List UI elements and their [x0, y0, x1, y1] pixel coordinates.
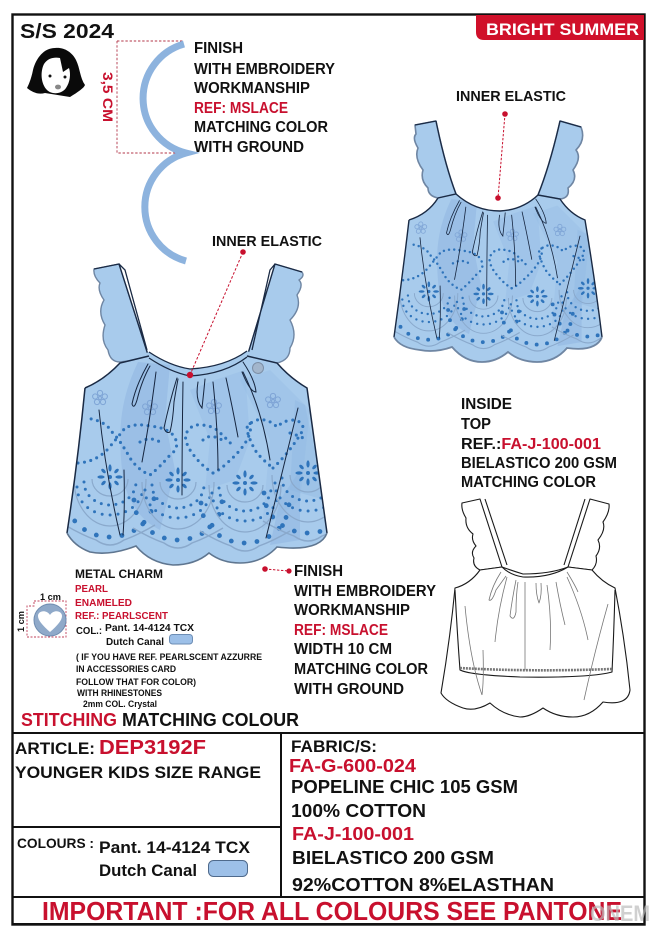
text block: inside top: BIELASTICO 200 GSM	[461, 455, 617, 472]
text block: bottom finish: WORKMANSHIP	[294, 602, 410, 619]
table cell: fabrics	[289, 738, 554, 895]
text block: lace finish: MATCHING COLOR	[194, 119, 328, 136]
callout: inner elastic, large top	[187, 233, 322, 378]
table cell: article	[15, 737, 261, 782]
small garment: blue top back view	[393, 121, 624, 362]
table cell: fabrics: 100% COTTON	[291, 801, 426, 821]
text block: metal charm: ENAMELED	[75, 597, 132, 609]
text block: lace finish: WORKMANSHIP	[194, 80, 310, 97]
icon: metal charm with dimensions: 1 cm	[16, 611, 26, 632]
text block: lace finish: FINISH	[194, 40, 243, 57]
badge: bright summer	[476, 15, 644, 40]
text block: metal charm: IN ACCESSORIES CARD	[76, 664, 176, 675]
note: stitching	[21, 709, 299, 730]
text block: bottom finish: FINISH	[294, 563, 343, 580]
header: season: S/S 2024	[20, 21, 115, 43]
table cell: fabrics: FA-G-600-024	[289, 756, 416, 776]
watermark: ONEM	[590, 901, 650, 926]
table cell: article: DEP3192F	[99, 737, 206, 759]
text block: metal charm: COL.:	[76, 625, 102, 637]
table cell: article: ARTICLE:	[15, 739, 95, 758]
text block: lace finish: WITH EMBROIDERY	[194, 61, 336, 78]
text block: inside top: REF.:FA-J-100-001	[461, 436, 601, 453]
text block: lace finish: WITH GROUND	[194, 139, 304, 156]
table cell: fabrics: FA-J-100-001	[292, 824, 414, 844]
icon: girl logo	[27, 48, 85, 97]
text block: inside top: MATCHING COLOR	[461, 474, 596, 491]
text block: bottom finish: MATCHING COLOR	[294, 661, 428, 678]
text block: metal charm: PEARL	[75, 583, 109, 595]
callout: inner elastic, small top: INNER ELASTIC	[456, 88, 566, 105]
note: stitching: MATCHING COLOUR	[122, 709, 299, 730]
text block: metal charm: 2mm COL. Crystal	[83, 699, 157, 709]
text block: metal charm: WITH RHINESTONES	[77, 688, 162, 699]
colour swatch	[208, 860, 248, 876]
text block: bottom finish: WITH EMBROIDERY	[294, 583, 437, 600]
table cell: fabrics: FABRIC/S:	[291, 738, 377, 756]
text block: bottom finish: REF: MSLACE	[294, 622, 388, 639]
table cell: colours: COLOURS :	[17, 835, 94, 851]
table cell: fabrics: BIELASTICO 200 GSM	[292, 848, 494, 868]
text block: lace finish	[194, 40, 336, 156]
text block: inside top: TOP	[461, 416, 491, 433]
callout: inner elastic, large top: INNER ELASTIC	[212, 233, 322, 250]
text block: metal charm: Pant. 14-4124 TCX	[105, 622, 194, 634]
table cell: article: YOUNGER KIDS SIZE RANGE	[15, 763, 261, 782]
lace finish sample	[117, 41, 186, 261]
table cell: colours: Dutch Canal	[99, 861, 197, 880]
badge: bright summer: BRIGHT SUMMER	[486, 20, 639, 39]
text block: metal charm: Dutch Canal	[106, 636, 164, 648]
dimension label: 3,5 cm: 3,5 CM	[100, 72, 116, 122]
text block: bottom finish: WIDTH 10 CM	[294, 641, 392, 658]
text block: metal charm: REF.: PEARLSCENT	[75, 610, 169, 622]
footer notice: IMPORTANT :FOR ALL COLOURS SEE PANTONE	[42, 896, 622, 926]
text block: metal charm	[75, 567, 262, 709]
table cell: colours	[17, 835, 251, 880]
callout: inner elastic, small top	[456, 88, 566, 201]
spec table frame	[12, 733, 645, 924]
inside view garment outline	[441, 499, 630, 717]
table cell: colours: Pant. 14-4124 TCX	[99, 838, 251, 857]
text block: metal charm: FOLLOW THAT FOR COLOR)	[76, 677, 196, 688]
text block: inside top: INSIDE	[461, 396, 512, 413]
text block: metal charm: METAL CHARM	[75, 567, 163, 581]
text block: metal charm: ( IF YOU HAVE REF. PEARLSCENT AZZURRE	[76, 652, 262, 663]
note: stitching: STITCHING	[21, 709, 117, 730]
text block: bottom finish	[262, 563, 437, 698]
table cell: fabrics: 92%COTTON 8%ELASTHAN	[292, 875, 554, 895]
icon: metal charm on garment	[252, 362, 264, 374]
table cell: fabrics: POPELINE CHIC 105 GSM	[291, 777, 518, 797]
large garment: blue top front view	[65, 264, 353, 565]
text block: inside top	[461, 396, 617, 491]
text block: bottom finish: WITH GROUND	[294, 681, 404, 698]
icon: metal charm with dimensions	[16, 592, 66, 637]
icon: metal charm with dimensions: 1 cm	[40, 592, 61, 602]
text block: lace finish: REF: MSLACE	[194, 100, 288, 117]
